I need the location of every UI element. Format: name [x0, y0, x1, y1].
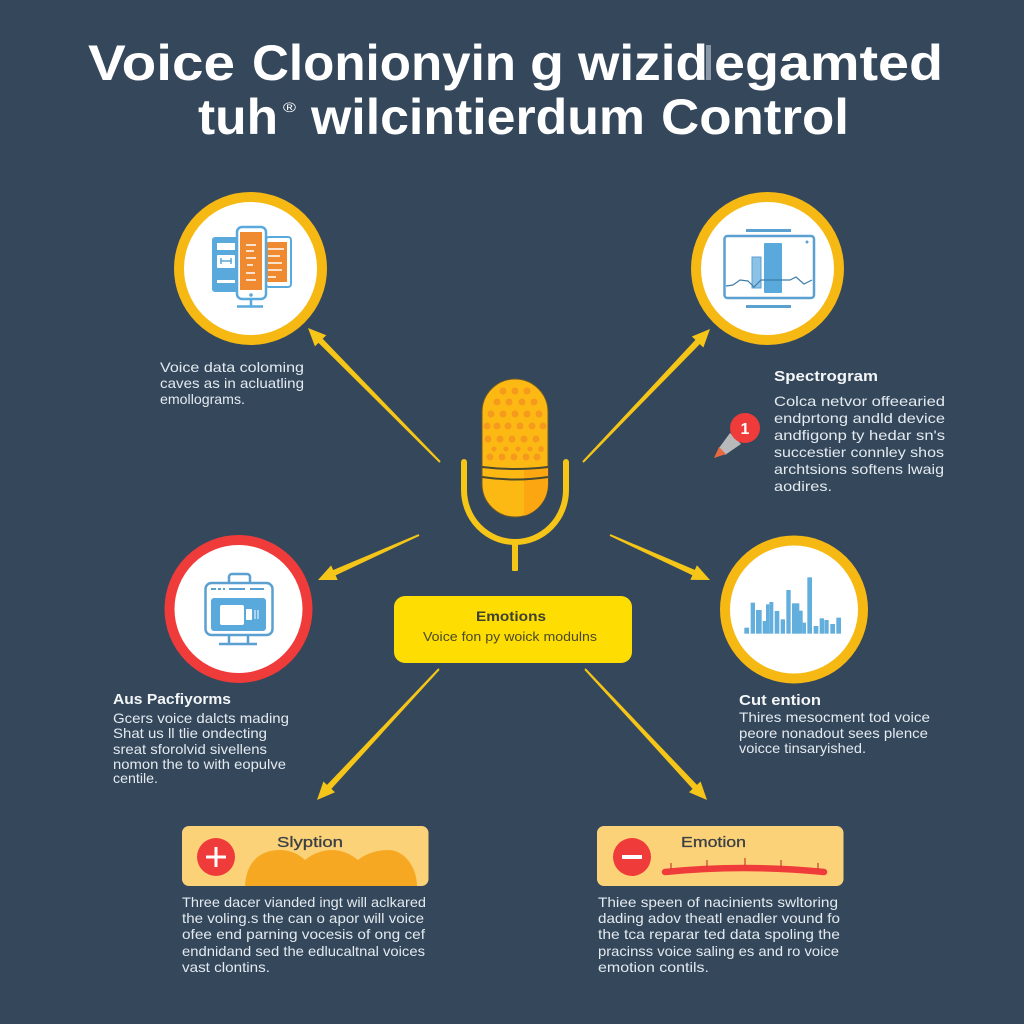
text: spectrogram description: endprtong andld device [774, 410, 945, 426]
text: aus pacfiyorms description: Shat us ll tlie ondecting [113, 725, 267, 741]
title: Control [661, 89, 849, 145]
banner: emotion: Emotion [681, 834, 746, 851]
title: Clonionyin [252, 35, 516, 91]
text: emotion description [598, 894, 840, 975]
title: ® [283, 99, 297, 115]
text: cut ention description [739, 709, 930, 756]
text: aus pacfiyorms description [113, 710, 289, 786]
text: emotion description: emotion contils. [598, 959, 709, 975]
text: slyption description: vast clontins. [182, 959, 270, 975]
panel: top right node [696, 197, 945, 494]
text: emotion description: dading adov theatl enadler vound fo [598, 910, 840, 926]
text: top left description: Voice data coloming [160, 359, 304, 375]
text: slyption description: Three dacer vianded ingt will aclkared [182, 894, 426, 910]
text: emotion description: the tca reparar ted data spoling the [598, 926, 840, 942]
text: spectrogram description: aodires. [774, 478, 832, 494]
text: top left description: emollograms. [160, 391, 245, 407]
text: spectrogram description: succestier connley shos [774, 444, 944, 460]
text: aus pacfiyorms description: sreat sforolvid sivellens [113, 741, 267, 757]
title: tuh [198, 89, 278, 145]
text: top left description [160, 359, 304, 407]
text: cut ention description: peore nonadout sees plence [739, 725, 928, 741]
icon: spectrogram circle [696, 197, 839, 340]
heading: cut ention: Cut ention [739, 692, 821, 709]
text: slyption description: endnidand sed the edlucaltnal voices [182, 943, 425, 959]
title [88, 35, 943, 145]
text: spectrogram description: andfigonp ty hedar sn's [774, 427, 945, 443]
title: g [530, 35, 564, 91]
heading: emotions: Emotions [476, 608, 546, 624]
text: cut ention description: Thires mesocment tod voice [739, 709, 930, 725]
text: top left description: caves as in acluatling [160, 375, 304, 391]
panel: middle right node [725, 540, 930, 756]
banner: slyption [182, 826, 428, 886]
arrow: to bottom right [584, 668, 707, 800]
title: Voice [88, 35, 235, 91]
text: spectrogram description [774, 393, 945, 494]
title: wizid [577, 35, 708, 91]
icon: monitor circle [170, 540, 308, 678]
panel: top left node [160, 197, 322, 407]
title: egamted [714, 35, 943, 91]
text: slyption description: the voling.s the can o apor will voice [182, 910, 424, 926]
banner: slyption: Slyption [277, 834, 343, 851]
text: aus pacfiyorms description: Gcers voice dalcts mading [113, 710, 289, 726]
text: aus pacfiyorms description: centile. [113, 770, 158, 786]
arrow: to top left [308, 328, 441, 463]
banner: emotion [597, 826, 844, 886]
arrow: to middle left [318, 534, 419, 580]
icon: marker with number badge: 1 [741, 421, 750, 438]
text: slyption description [182, 894, 426, 975]
icon: marker with number badge [714, 413, 760, 458]
text: emotions description: Voice fon py woick modulns [423, 629, 598, 644]
text: emotion description: Thiee speen of nacinients swltoring [598, 894, 838, 910]
panel: bottom right card [597, 826, 844, 975]
panel: bottom left card [182, 826, 428, 975]
text: cut ention description: voicce tinsaryished. [739, 740, 866, 756]
icon: bar chart circle [725, 540, 863, 678]
text: emotion description: pracinss voice saling es and ro voice [598, 943, 839, 959]
text: spectrogram description: archtsions softens lwaig [774, 461, 944, 477]
heading: aus pacfiyorms: Aus Pacfiyorms [113, 691, 231, 708]
arrow: to middle right [610, 534, 710, 580]
title: wilcintierdum [310, 89, 645, 145]
text: aus pacfiyorms description: nomon the to with eopulve [113, 756, 286, 772]
panel: middle left node [113, 540, 308, 786]
heading: spectrogram: Spectrogram [774, 368, 878, 385]
arrow: to bottom left [317, 668, 440, 800]
icon: devices circle [179, 197, 322, 340]
icon: central microphone [464, 379, 566, 571]
text: slyption description: ofee end parning vocesis of ong cef [182, 926, 425, 942]
arrow: to top right [582, 329, 710, 463]
panel: emotions box [394, 596, 632, 663]
text: spectrogram description: Colca netvor offeearied [774, 393, 945, 409]
